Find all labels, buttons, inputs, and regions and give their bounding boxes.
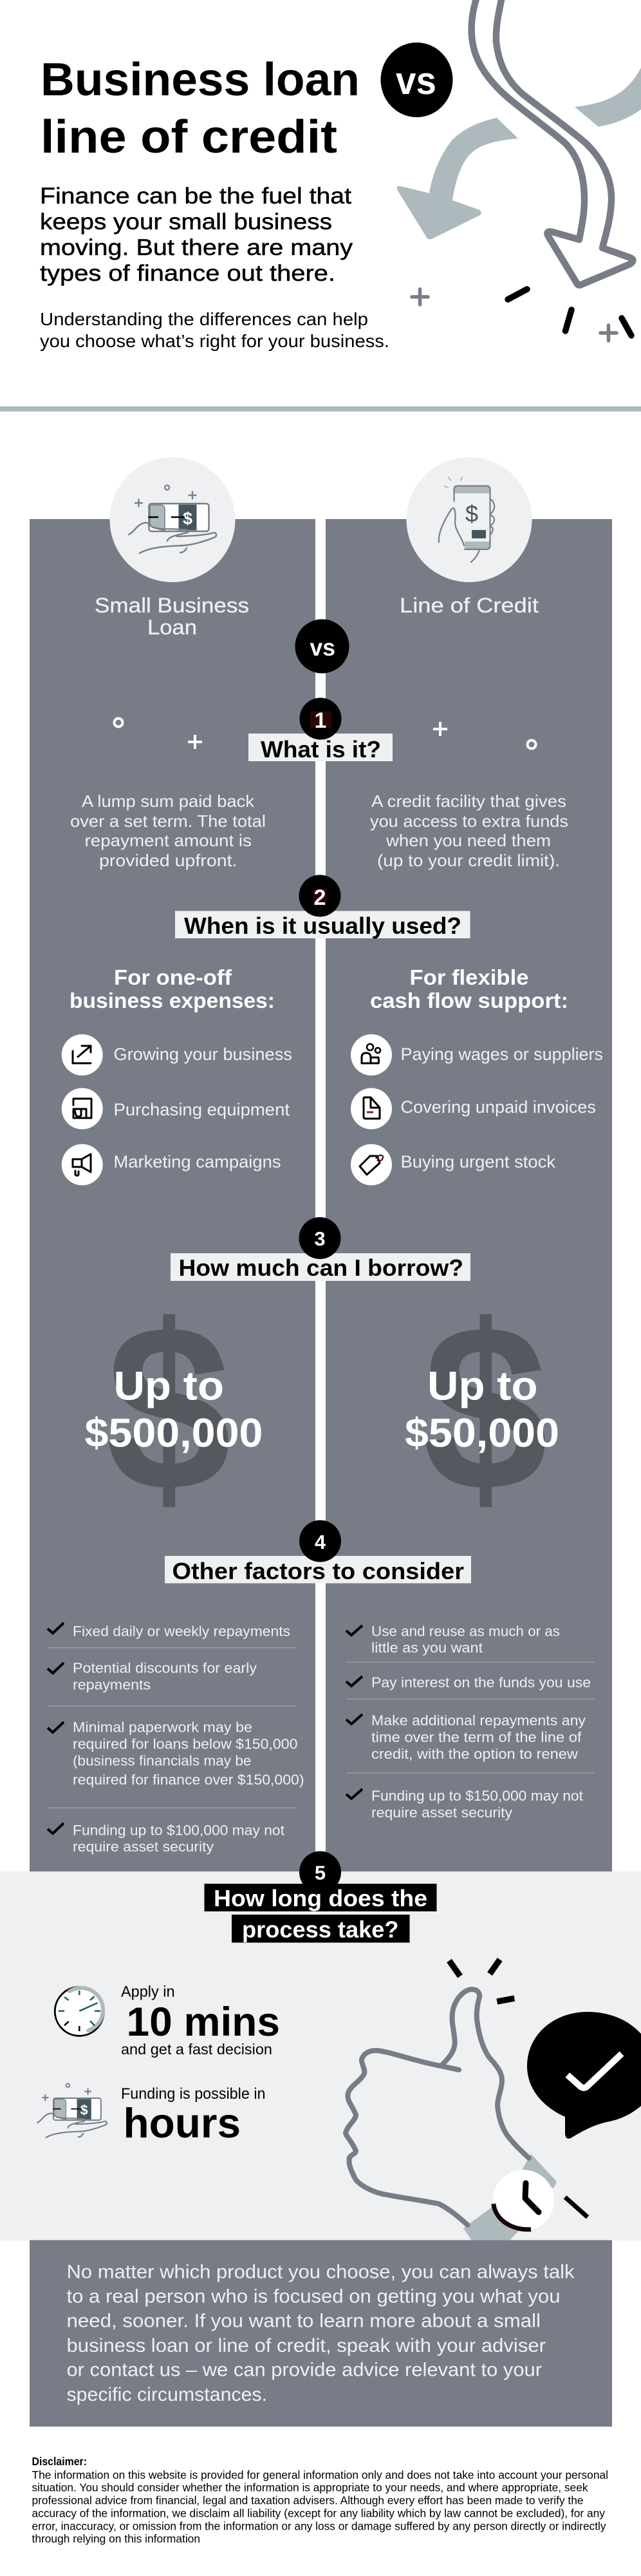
checklist: loan factors: required for finance over $150,000) [73,1772,304,1788]
list item: paying wages: Paying wages or suppliers [400,1045,603,1064]
panel heading: line of credit: Line of Credit [400,594,539,617]
disclaimer: accuracy of the information, we disclaim all liability (except for any liability which by law cannot be excluded), for any [32,2506,605,2519]
icon: hand holding money small: $ [80,2102,88,2117]
subheading: flexible: cash flow support: [370,989,568,1012]
subheading: one-off: For one-off [114,965,232,989]
intro text: types of finance out there. [40,261,335,286]
band: process section background [0,1871,641,2240]
vs badge: panels: vs [310,634,335,661]
panel: closing statement: need, sooner. If you want to learn more about a small [67,2311,541,2331]
text: loan definition: A lump sum paid back [82,791,255,811]
checklist: loan factors: Fixed daily or weekly repayments [73,1623,290,1640]
amount: up to 500,000: $ [106,1276,232,1540]
intro text: Finance can be the fuel that [40,184,351,209]
icon: phone in hand [407,457,532,582]
disclaimer: situation. You should consider whether the information is appropriate to your needs, and where appropriate, seek [32,2481,588,2494]
text: apply in 10 mins: Apply in [121,1984,175,2000]
subheading: flexible [370,965,568,1012]
vs badge: header [381,43,453,117]
text: credit definition: you access to extra funds [370,811,568,831]
section heading 5: how long does the process take: How long does the [214,1885,427,1911]
intro text: keeps your small business [40,209,332,234]
checklist: loan factors: repayments [73,1677,151,1692]
disclaimer: through relying on this information [32,2532,200,2545]
section heading 1: what is it: What is it? [261,736,381,762]
text: credit definition: A credit facility that gives [371,791,566,811]
list item: buying urgent stock: Buying urgent stock [400,1152,556,1171]
vs badge: panels [295,620,349,674]
panel: closing statement: specific circumstances. [67,2384,267,2405]
intro text: moving. But there are many [40,235,353,260]
amount: up to 50,000: Up to [427,1364,538,1409]
panel: line of credit [326,519,612,1871]
checklist: credit factors: time over the term of the line of [371,1729,582,1745]
checklist: credit factors: require asset security [371,1804,512,1821]
icon: hand holding money small [37,2083,107,2137]
text: loan definition [70,791,266,870]
list item: covering invoices [351,1088,596,1130]
panel: small business loan [30,519,315,1871]
text: funding in hours: Funding is possible in [121,2085,265,2103]
section heading 5: how long does the process take [205,1851,436,1942]
disclaimer: professional advice from financial, legal and taxation advisers. Although every effort has been made to verify the [32,2494,583,2506]
intro text [40,184,389,351]
decorations: section 1 [115,719,535,749]
section heading 4: other factors [165,1520,471,1584]
text: funding in hours: hours [124,2099,241,2146]
checklist: credit factors: Funding up to $150,000 may not [371,1788,583,1804]
title: line of credit [41,111,337,163]
disclaimer: Disclaimer: [32,2455,87,2468]
subheading: one-off [70,965,275,1012]
checklist: credit factors: Use and reuse as much or as [371,1623,560,1640]
amount: up to 50,000: $50,000 [405,1410,559,1455]
text: credit definition: (up to your credit limit). [377,851,560,870]
panel heading: small business loan [95,594,249,639]
panel: closing statement: No matter which product you choose, you can always talk [67,2262,575,2282]
section heading 1: what is it [248,698,393,762]
list item: growing your business [62,1034,292,1075]
text: loan definition: over a set term. The total [70,811,266,831]
list item: purchasing equipment: Purchasing equipment [113,1100,290,1119]
text: funding in hours [121,2085,265,2146]
title [41,54,360,163]
icon: speech bubble with tick [527,2012,641,2139]
checklist: loan factors: Potential discounts for early [73,1660,257,1676]
illustration: thumbs up with watch [346,1960,588,2240]
checklist: credit factors: Pay interest on the funds you use [371,1674,591,1690]
subheading: flexible: For flexible [409,965,529,989]
checklist: loan factors: Minimal paperwork may be [73,1719,252,1735]
icon: hand holding money: $ [183,509,192,528]
checklist: loan factors: require asset security [73,1839,214,1855]
section heading 4: other factors: Other factors to consider [172,1558,464,1584]
decorative plus: header [412,289,428,305]
vs badge: header: vs [396,59,436,102]
text: loan definition: repayment amount is [85,831,252,850]
text: apply in 10 mins [121,1984,280,2058]
section heading 2: when is it usually used: When is it usually used? [184,913,461,939]
section heading 1: what is it: 1 [315,708,326,733]
list item: paying wages [351,1034,603,1075]
list item: marketing campaigns [62,1144,281,1185]
icon: hand holding money [109,457,236,582]
section heading 3: how much can i borrow: How much can I borrow? [179,1255,463,1281]
icon: clock [55,1987,104,2036]
checklist: loan factors [47,1623,304,1855]
list item: marketing campaigns: Marketing campaigns [113,1152,281,1171]
intro text: Understanding the differences can help [40,309,368,329]
text: apply in 10 mins: 10 mins [126,2000,280,2045]
checklist: credit factors: Make additional repayments any [371,1712,586,1728]
subheading: one-off: business expenses: [70,989,275,1012]
arrow: outlined arrow [472,0,633,285]
text: credit definition [370,791,568,870]
checklist: loan factors: (business financials may be [73,1753,251,1768]
panel: closing statement [30,2240,612,2427]
list item: growing your business: Growing your business [113,1045,292,1064]
text: loan definition: provided upfront. [99,851,237,870]
section heading 5: how long does the process take: 5 [315,1861,326,1884]
amount: up to 500,000: Up to [113,1364,224,1409]
intro text: you choose what’s right for your business. [40,331,389,351]
section heading 2: when is it usually used: 2 [314,886,326,910]
list item: purchasing equipment [62,1088,290,1130]
section heading 5: how long does the process take: process take? [242,1917,399,1942]
section heading 2: when is it usually used [175,875,470,939]
panel heading: small business loan: Small Business [95,594,249,617]
text: credit definition: when you need them [386,831,551,850]
section heading 3: how much can i borrow [171,1217,470,1281]
disclaimer [32,2455,608,2545]
checklist: loan factors: required for loans below $150,000 [73,1736,297,1752]
checklist: credit factors [346,1623,595,1821]
divider rule [0,406,641,412]
amount: up to 50,000: $ [422,1276,548,1540]
checklist: credit factors: little as you want [371,1640,483,1656]
panel: closing statement: business loan or line of credit, speak with your adviser [67,2335,546,2356]
decorative plus: header right [600,325,617,341]
panel: closing statement: to a real person who is focused on getting you what you [67,2286,560,2307]
disclaimer: The information on this website is provided for general information only and does not take into account your personal [32,2468,608,2481]
arrow: filled grey arrows [397,68,641,240]
list item: buying urgent stock [351,1144,556,1185]
panel: closing statement: or contact us – we can provide advice relevant to your [67,2360,542,2380]
title: Business loan [41,54,360,106]
amount: up to 500,000: $500,000 [85,1410,263,1455]
impact dashes: header [508,289,631,336]
checklist: credit factors: credit, with the option to renew [371,1746,578,1762]
checklist: loan factors: Funding up to $100,000 may not [73,1823,284,1838]
panel heading: small business loan: Loan [147,616,197,639]
list item: covering invoices: Covering unpaid invoices [400,1097,596,1117]
section heading 4: other factors: 4 [315,1531,326,1553]
text: apply in 10 mins: and get a fast decision [121,2041,272,2058]
disclaimer: error, inaccuracy, or omission from the information or any loss or damage suffered by any person directly or indirectly [32,2519,606,2532]
icon: phone in hand: $ [465,500,478,527]
section heading 3: how much can i borrow: 3 [314,1227,326,1250]
